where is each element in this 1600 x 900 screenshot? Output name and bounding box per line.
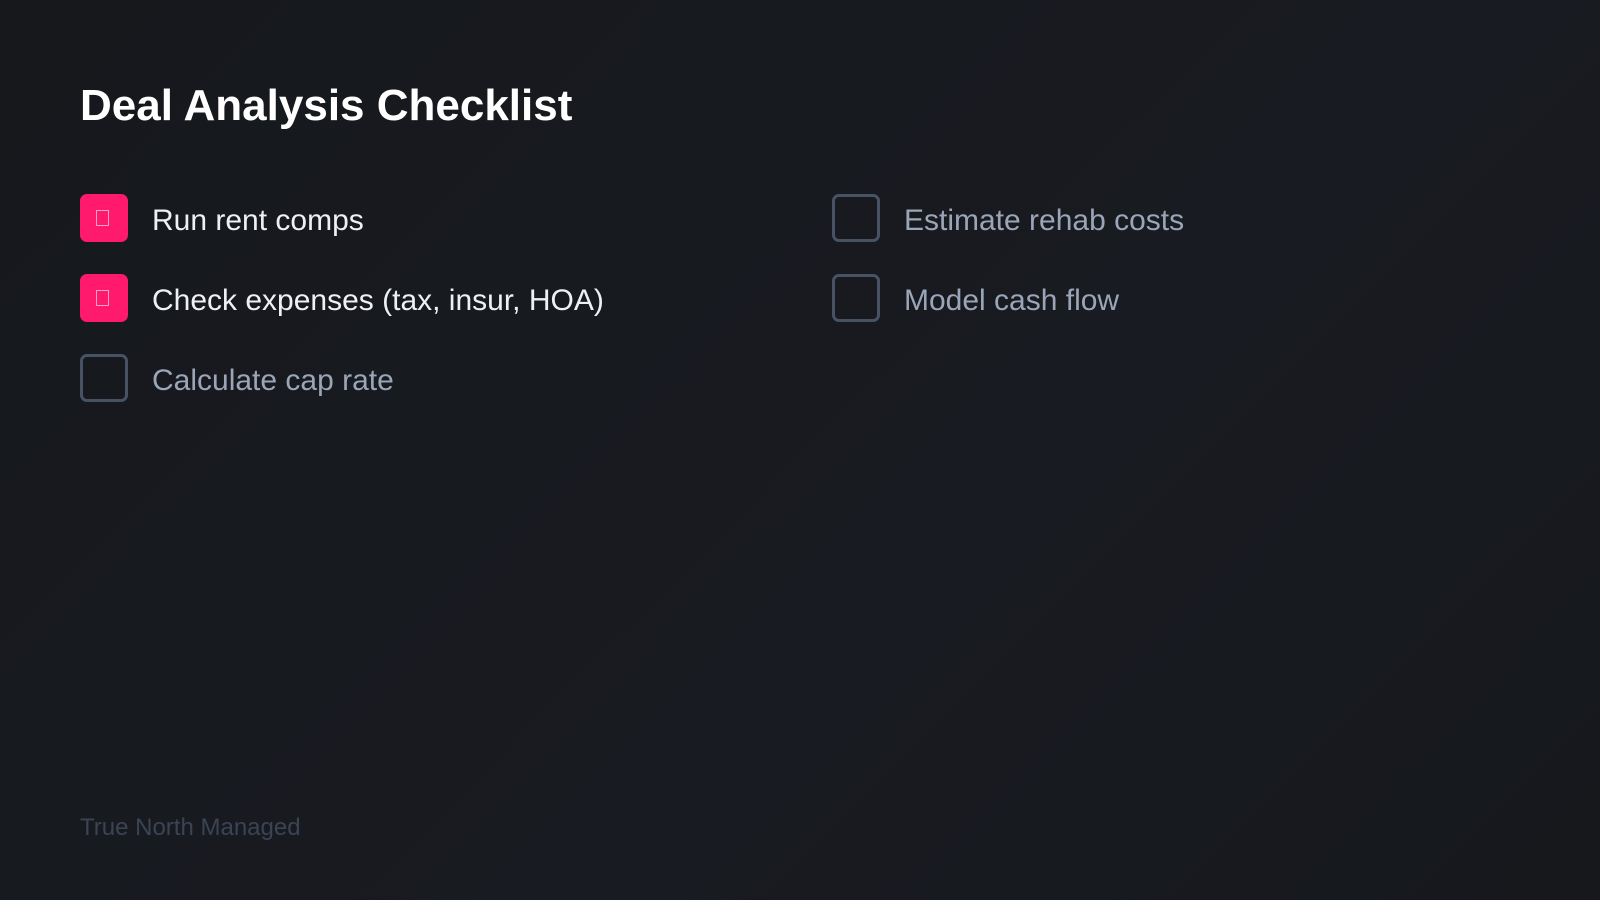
footer brand: True North Managed bbox=[80, 814, 301, 841]
item: estimate rehab costs bbox=[832, 194, 1184, 242]
item: run rent comps (checked) bbox=[80, 194, 364, 242]
item: calculate cap rate: Calculate cap rate bbox=[152, 364, 394, 397]
item: model cash flow: Model cash flow bbox=[904, 284, 1119, 317]
item: model cash flow bbox=[832, 274, 1120, 322]
item: estimate rehab costs: Estimate rehab costs bbox=[904, 204, 1184, 237]
item: calculate cap rate bbox=[80, 354, 394, 402]
title: Deal Analysis Checklist bbox=[80, 81, 572, 130]
item: run rent comps (checked): Run rent comps bbox=[152, 204, 364, 237]
item: check expenses (checked): Check expenses (tax, insur, HOA) bbox=[152, 284, 604, 317]
item: check expenses (checked) bbox=[80, 274, 604, 322]
